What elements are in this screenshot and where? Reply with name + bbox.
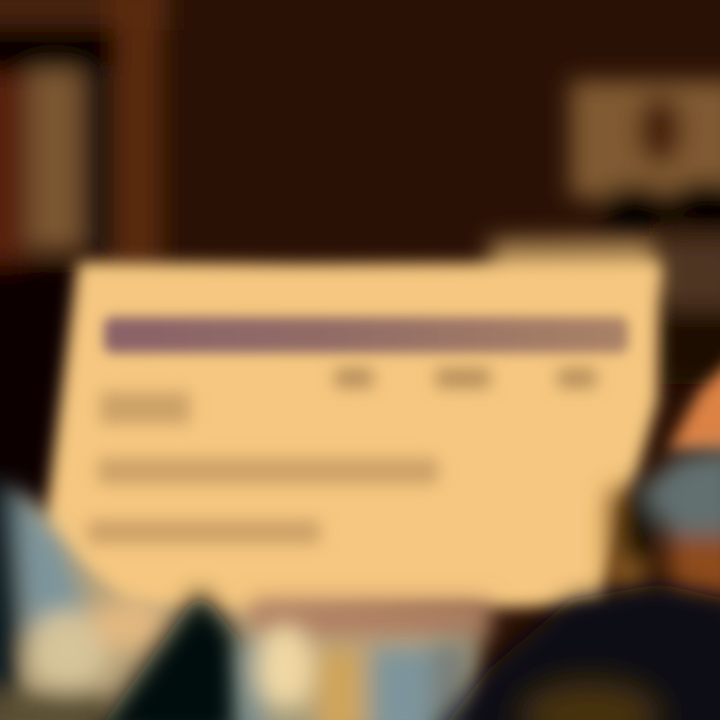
bookshelf bbox=[0, 0, 170, 502]
pinkish lower edge of document bbox=[250, 600, 490, 636]
purple header bar bbox=[104, 317, 628, 353]
blurred column labels bbox=[335, 368, 596, 388]
cream and blue fabric at bottom centre bbox=[236, 624, 472, 720]
dark shoulder at bottom right bbox=[432, 584, 720, 720]
dark navy figure in foreground bbox=[90, 590, 250, 720]
framed picture on wall bbox=[570, 80, 720, 384]
warm brown shadow on shoulder bbox=[518, 679, 662, 720]
right hand and grey-blue sleeve bbox=[608, 448, 720, 603]
pale top flap of sheet bbox=[490, 238, 664, 290]
blue fabric at bottom left bbox=[0, 468, 168, 720]
orange sleeve at right bbox=[668, 352, 720, 454]
document sheet bbox=[44, 238, 664, 612]
blurred text lines bbox=[88, 392, 438, 544]
light base below document, lower left and centre bbox=[0, 500, 480, 720]
